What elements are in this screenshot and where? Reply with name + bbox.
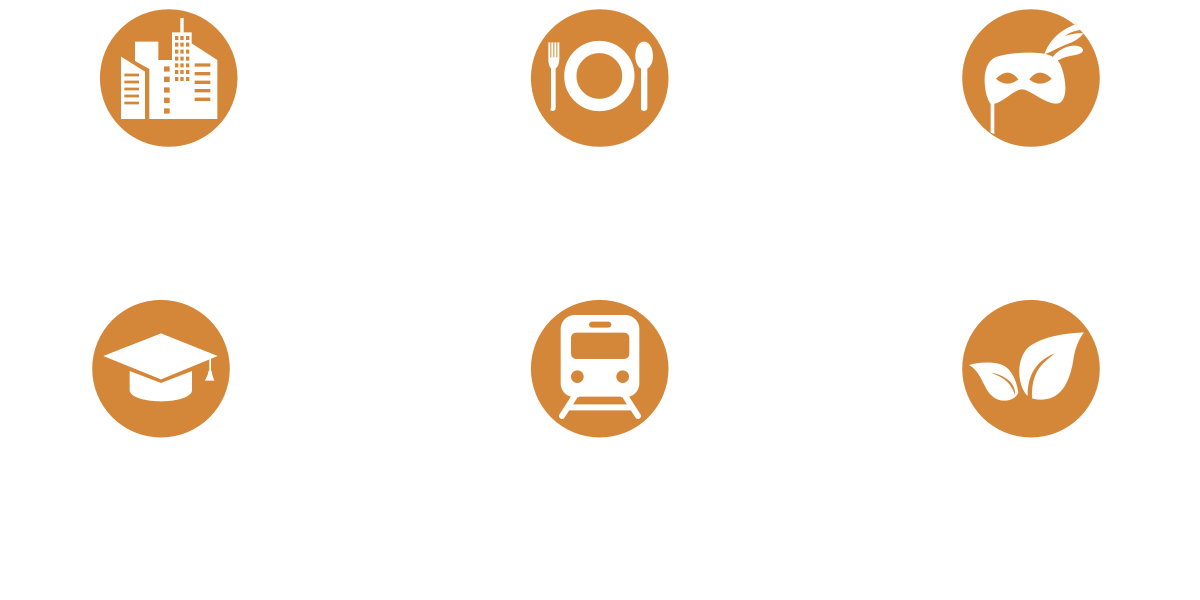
icon: leaves (962, 300, 1100, 438)
icon: city buildings (100, 9, 238, 147)
icon: plate with fork and spoon (531, 9, 668, 147)
icon: carnival mask with feather (962, 9, 1100, 147)
icon: train (531, 300, 668, 438)
icon: graduation cap (92, 300, 230, 438)
